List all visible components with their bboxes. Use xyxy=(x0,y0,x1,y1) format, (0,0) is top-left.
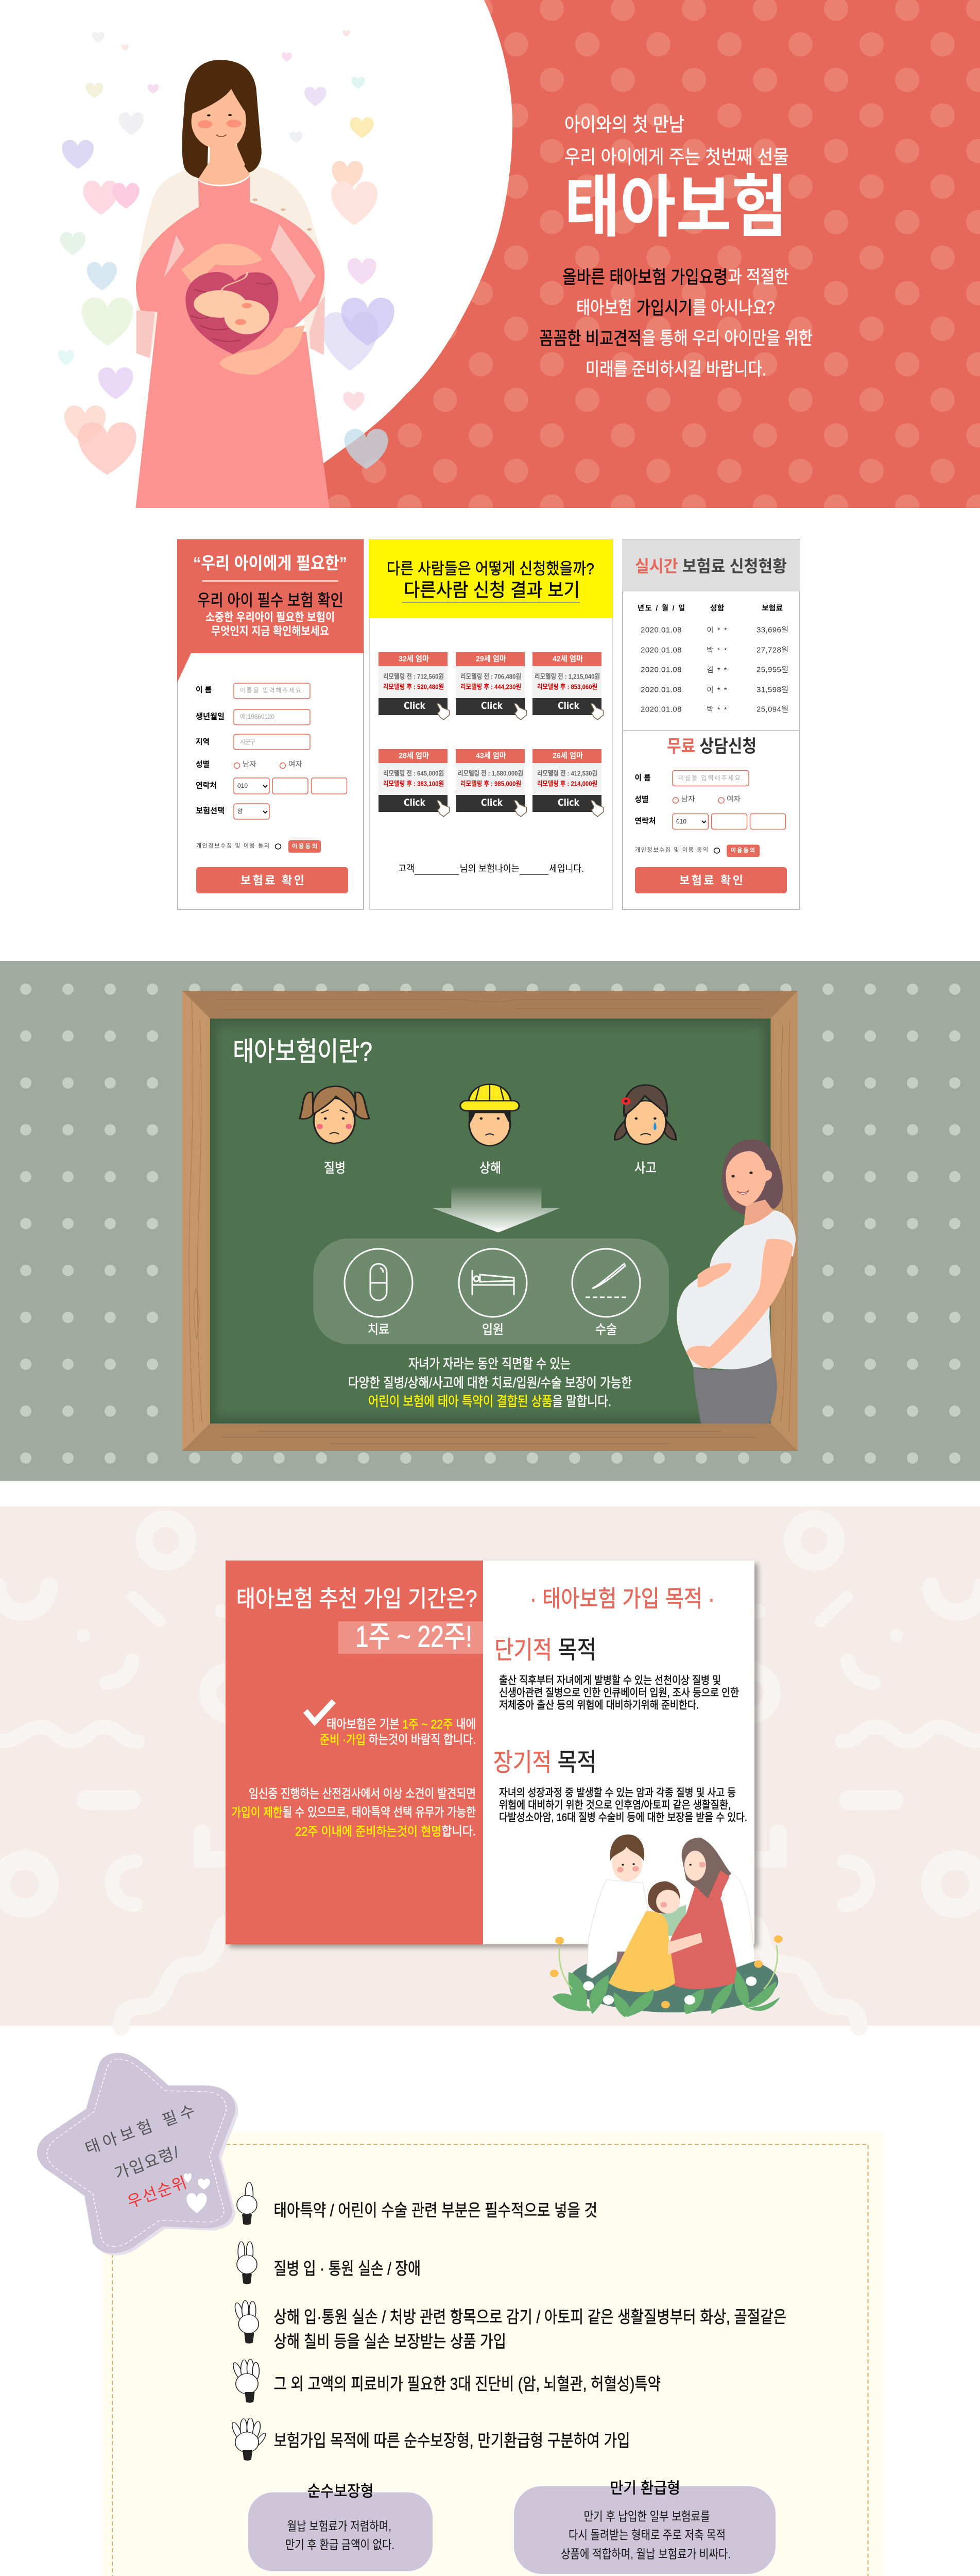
hero description: 태아보험 가입시기를 아시나요? xyxy=(576,298,775,318)
white panel xyxy=(226,1561,754,1944)
checklist text: 상해 칠비 등을 실손 보장받는 상품 가입 xyxy=(274,2332,506,2351)
consult gender field: 여자 xyxy=(727,794,741,803)
card: 28세: 리모델링 전 : 645,000원 xyxy=(383,770,444,777)
status table: 25,094원 xyxy=(757,705,788,714)
panel: realtime status and free consult xyxy=(622,539,800,909)
short-term purpose xyxy=(494,1636,739,1711)
card: 26세: 리모델링 전 : 412,530원 xyxy=(537,770,597,777)
box: maturity refund xyxy=(513,2480,776,2574)
consult consent row: 이용동의 xyxy=(731,847,755,854)
exam note: 22주 이내에 준비하는것이 현명합니다. xyxy=(295,1825,476,1838)
status table: 31,598원 xyxy=(757,685,788,694)
status table xyxy=(638,604,788,714)
mother xyxy=(664,1838,755,1989)
face labels: 상해 xyxy=(479,1160,501,1176)
card: 29세 xyxy=(456,652,526,720)
box: pure coverage: 월납 보험료가 저렴하며, xyxy=(287,2519,391,2534)
status table: 보험료 xyxy=(762,604,783,612)
phone field: 연락처 xyxy=(196,781,217,790)
short-term purpose: 신생아관련 질병으로 인한 인큐베이터 입원, 조사 등으로 인한 xyxy=(499,1687,739,1699)
consult name field xyxy=(634,771,749,786)
consult phone field xyxy=(634,814,786,829)
board description: 어린이 보험에 태아 특약이 결합된 상품을 말합니다. xyxy=(368,1394,611,1409)
star badge: 우선순위 xyxy=(125,2173,189,2211)
card: 32세: 32세 엄마 xyxy=(399,654,429,664)
status table: 박 * * xyxy=(707,705,727,714)
form heading: 우리 아이 필수 보험 확인 xyxy=(197,591,343,609)
box: pure coverage: 순수보장형 xyxy=(307,2483,374,2500)
yellow heading xyxy=(387,560,594,603)
leaves and flowers xyxy=(550,1935,783,2017)
box: pure coverage xyxy=(248,2483,433,2572)
status table: 년도 / 월 / 일 xyxy=(638,604,685,612)
card: 43세: 리모델링 전 : 1,580,000원 xyxy=(458,770,523,777)
long-term purpose: 위험에 대비하기 위한 것으로 인후염/아토피 같은 생활질환, xyxy=(499,1799,731,1811)
recommendation note: 준비 ·가입 하는것이 바람직 합니다. xyxy=(320,1733,476,1747)
card: 42세: 리모델링 후 : 853,060원 xyxy=(537,683,597,690)
status table: 김 * * xyxy=(707,666,727,674)
insurance select field: 보험선택 xyxy=(196,807,225,815)
card: 43세: 43세 엄마 xyxy=(476,751,506,760)
consult submit button xyxy=(635,867,787,893)
insurance age sentence: 세입니다. xyxy=(549,863,584,874)
card: 28세 xyxy=(379,749,449,817)
submit button: 보험료 확인 xyxy=(240,874,304,887)
long-term purpose: 다발성소아암, 16대 질병 수술비 등에 대한 보장을 받을 수 있다. xyxy=(499,1811,747,1824)
checklist text: 보험가입 목적에 따른 순수보장형, 만기환급형 구분하여 가입 xyxy=(274,2431,630,2450)
icon: five finger hand xyxy=(230,2418,268,2460)
card: 28세: 리모델링 후 : 383,100원 xyxy=(383,780,444,787)
face labels: 질병 xyxy=(324,1160,346,1176)
icon: three finger hand xyxy=(233,2300,259,2343)
phone field xyxy=(196,778,347,794)
insurance select field: 암 xyxy=(237,808,243,815)
form heading quote: “우리 아이에게 필요한” xyxy=(193,553,347,573)
name field xyxy=(196,683,310,699)
long-term purpose: 장기적 목적 xyxy=(493,1749,596,1776)
gender field xyxy=(196,760,302,769)
treatment panel: 치료 xyxy=(368,1323,389,1337)
consent row: 개인정보수집 및 이용 동의 xyxy=(196,842,269,849)
card: 29세: 29세 엄마 xyxy=(476,654,506,664)
hero description: 미래를 준비하시길 바랍니다. xyxy=(586,360,766,379)
checklist text: 그 외 고액의 피료비가 필요한 3대 진단비 (암, 뇌혈관, 허혈성)특약 xyxy=(274,2374,661,2394)
consent row xyxy=(196,840,321,853)
pregnant teacher xyxy=(677,1139,796,1423)
consult phone field: 010 xyxy=(676,818,686,825)
hero small headline: 아이와의 첫 만남 xyxy=(564,114,684,135)
icon: scalpel xyxy=(572,1249,640,1317)
name field: 이 름 xyxy=(196,685,212,694)
card: 26세 xyxy=(532,749,604,817)
gender field: 여자 xyxy=(288,760,302,768)
insurance age sentence: 고객 xyxy=(398,863,415,874)
region field: 시군구 xyxy=(240,738,255,745)
checklist text xyxy=(274,2201,786,2450)
long-term purpose xyxy=(493,1749,747,1824)
form subheading xyxy=(205,611,335,638)
icon: injured boy with helmet xyxy=(460,1084,519,1146)
background pattern left xyxy=(0,1519,257,2027)
star badge: 가입요령/ xyxy=(112,2143,181,2183)
card: 26세: Click xyxy=(558,797,579,808)
exam note: 가입이 제한될 수 있으므로, 태아특약 선택 유무가 가능한 xyxy=(232,1805,476,1820)
card: 42세: 42세 엄마 xyxy=(553,654,583,664)
card: 29세: 리모델링 후 : 444,230원 xyxy=(460,683,521,690)
father xyxy=(587,1835,650,1978)
card: 28세: 28세 엄마 xyxy=(399,751,429,760)
section: what is fetal insurance xyxy=(0,961,980,1481)
family illustration xyxy=(550,1835,783,2017)
chalkboard xyxy=(210,1019,770,1423)
box: maturity refund: 다시 돌려받는 형태로 주로 저축 목적 xyxy=(569,2529,726,2542)
insurance select field xyxy=(196,804,269,819)
daughter xyxy=(608,1882,702,1992)
highlight period: 1주 ~ 22주! xyxy=(355,1620,472,1654)
consent row: 이용동의 xyxy=(292,843,317,850)
form subheading: 무엇인지 지금 확인해보세요 xyxy=(211,624,329,638)
icon: check mark xyxy=(305,1701,334,1722)
status table: 2020.01.08 xyxy=(641,666,682,674)
status table: 이 * * xyxy=(707,626,727,634)
status table: 2020.01.08 xyxy=(641,705,682,714)
card: 42세: 리모델링 전 : 1,215,040원 xyxy=(535,673,600,680)
checklist text: 상해 입·통원 실손 / 처방 관련 항목으로 감기 / 아토피 같은 생활질병부터 화상, 골절같은 xyxy=(274,2307,786,2327)
icon: pill xyxy=(345,1249,412,1317)
submit button xyxy=(196,867,348,893)
panel: other applicants results xyxy=(369,539,613,909)
status table: 25,955원 xyxy=(757,666,788,674)
board title: 태아보험이란? xyxy=(233,1037,372,1067)
box: maturity refund: 상품에 적합하며, 월납 보험료가 비싸다. xyxy=(561,2547,731,2562)
checklist text: 질병 입 · 통원 실손 / 장애 xyxy=(274,2259,421,2278)
card: 28세: Click xyxy=(404,797,425,808)
board description: 자녀가 자라는 동안 직면할 수 있는 xyxy=(408,1356,571,1371)
star badge: 태아보험 필수 xyxy=(83,2102,197,2158)
right heading: · 태아보험 가입 목적 · xyxy=(530,1586,715,1612)
board description: 다양한 질병/상해/사고에 대한 치료/입원/수술 보장이 가능한 xyxy=(348,1375,632,1391)
card: 43세: 리모델링 후 : 985,000원 xyxy=(460,780,521,787)
card: 26세: 리모델링 후 : 214,000원 xyxy=(537,780,597,787)
card: 43세: Click xyxy=(481,797,503,808)
region field: 지역 xyxy=(196,738,210,746)
long-term purpose: 자녀의 성장과정 중 발생할 수 있는 암과 각종 질병 및 사고 등 xyxy=(499,1787,736,1799)
status table: 박 * * xyxy=(707,646,727,654)
box: maturity refund: 만기 후 납입한 일부 보험료를 xyxy=(584,2510,710,2523)
consult name field: 이 름 xyxy=(634,774,651,782)
recommendation note xyxy=(320,1718,476,1747)
insurance age sentence: 님의 보험나이는 xyxy=(460,863,520,874)
yellow heading: 다른사람 신청 결과 보기 xyxy=(404,579,580,601)
box: maturity refund: 만기 환급형 xyxy=(610,2480,680,2497)
shawl xyxy=(136,164,325,358)
short-term purpose: 단기적 목적 xyxy=(494,1636,596,1664)
birth date field: 예)19860120 xyxy=(240,713,274,720)
card: 42세 xyxy=(532,652,604,720)
consult gender field: 남자 xyxy=(681,794,695,803)
treatment panel xyxy=(313,1239,669,1344)
pastel hearts and pregnant mother illustration xyxy=(58,30,394,508)
icon: five glove hands xyxy=(230,2182,268,2460)
consult consent row: 개인정보수집 및 이용 동의 xyxy=(635,846,708,853)
card: 32세 xyxy=(379,652,449,720)
phone field: 010 xyxy=(237,782,248,789)
exam note: 임신중 진행하는 산전검사에서 이상 소견이 발견되면 xyxy=(249,1787,476,1801)
consult heading: 무료 상담신청 xyxy=(667,737,757,756)
hero description: 꼼꼼한 비교견적을 통해 우리 아이만을 위한 xyxy=(539,329,813,348)
consult name field: 이름을 입력해주세요. xyxy=(678,774,743,782)
consult gender field: 성별 xyxy=(634,795,649,804)
star badge xyxy=(37,2053,238,2256)
icon: four finger hand xyxy=(231,2359,259,2402)
womb heart with baby xyxy=(185,272,278,354)
gender field: 성별 xyxy=(196,760,210,769)
face labels xyxy=(324,1160,657,1176)
exam note xyxy=(232,1787,476,1838)
birth date field xyxy=(196,709,310,725)
status table: 2020.01.08 xyxy=(641,625,682,635)
hero title: 태아보험 xyxy=(564,169,787,245)
form subheading: 소중한 우리아이 필요한 보험이 xyxy=(205,611,335,623)
icon: one finger hand xyxy=(237,2182,257,2225)
treatment panel: 입원 xyxy=(482,1323,504,1337)
consult submit button: 보험료 확인 xyxy=(679,874,743,887)
hair and face xyxy=(182,60,262,185)
icon: sick girl xyxy=(300,1087,369,1143)
icon: crying girl xyxy=(615,1085,676,1144)
insurance age sentence xyxy=(398,863,584,875)
card: 32세: Click xyxy=(404,700,425,711)
checklist text: 태아특약 / 어린이 수술 관련 부분은 필수적으로 넣을 것 xyxy=(274,2201,597,2219)
hero description: 올바른 태아보험 가입요령과 적절한 xyxy=(562,267,789,287)
hero description xyxy=(539,267,813,379)
consult phone field: 연락처 xyxy=(634,817,656,825)
board description xyxy=(348,1356,632,1409)
hero second headline: 우리 아이에게 주는 첫번째 선물 xyxy=(564,146,789,168)
treatment panel: 수술 xyxy=(595,1323,617,1337)
dress xyxy=(135,176,330,508)
card: 29세: Click xyxy=(481,700,503,711)
wooden frame xyxy=(182,991,798,1451)
icon: two finger hand xyxy=(237,2242,257,2284)
card: 43세 xyxy=(456,749,526,817)
card: 32세: 리모델링 전 : 712,560원 xyxy=(383,673,444,680)
status table: 2020.01.08 xyxy=(641,685,682,694)
hero section xyxy=(0,0,980,508)
birth date field: 생년월일 xyxy=(196,712,225,721)
status table: 27,728원 xyxy=(757,646,788,654)
section: enrollment checklist xyxy=(37,2053,882,2576)
status table: 성함 xyxy=(710,604,725,612)
consult gender field xyxy=(634,794,741,804)
card: 42세: Click xyxy=(558,700,579,711)
status table: 이 * * xyxy=(707,686,727,694)
face labels: 사고 xyxy=(634,1160,657,1176)
consult consent row xyxy=(635,845,760,857)
section: recommended enrollment period xyxy=(0,1506,980,2027)
gender field: 남자 xyxy=(243,760,256,768)
box: pure coverage: 만기 후 환급 금액이 없다. xyxy=(285,2538,394,2552)
card: 32세: 리모델링 후 : 520,480원 xyxy=(383,683,444,690)
short-term purpose: 저체중아 출산 등의 위험에 대비하기위해 준비한다. xyxy=(499,1699,699,1711)
arms and hands xyxy=(181,244,305,375)
status heading: 실시간 보험료 신청현황 xyxy=(635,557,787,575)
yellow heading: 다른 사람들은 어떻게 신청했을까? xyxy=(387,560,594,578)
card: 29세: 리모델링 전 : 706,480원 xyxy=(460,673,521,680)
name field: 이름을 입력해주세요. xyxy=(240,687,304,694)
region field xyxy=(196,734,310,750)
arrow xyxy=(432,1185,560,1232)
status table: 33,696원 xyxy=(757,625,788,635)
panel: premium check form xyxy=(177,539,364,909)
child faces and teacher illustration xyxy=(300,1084,796,1423)
icon: hospital bed xyxy=(459,1249,527,1317)
short-term purpose: 출산 직후부터 자녀에게 발병할 수 있는 선천이상 질병 및 xyxy=(499,1674,721,1687)
red panel xyxy=(226,1561,483,1944)
card: 26세: 26세 엄마 xyxy=(553,751,583,760)
recommendation note: 태아보험은 기본 1주 ~ 22주 내에 xyxy=(326,1718,476,1731)
status table: 2020.01.08 xyxy=(641,646,682,654)
background pattern right xyxy=(723,1519,980,2027)
red panel heading: 태아보험 추천 가입 기간은? xyxy=(236,1586,477,1612)
